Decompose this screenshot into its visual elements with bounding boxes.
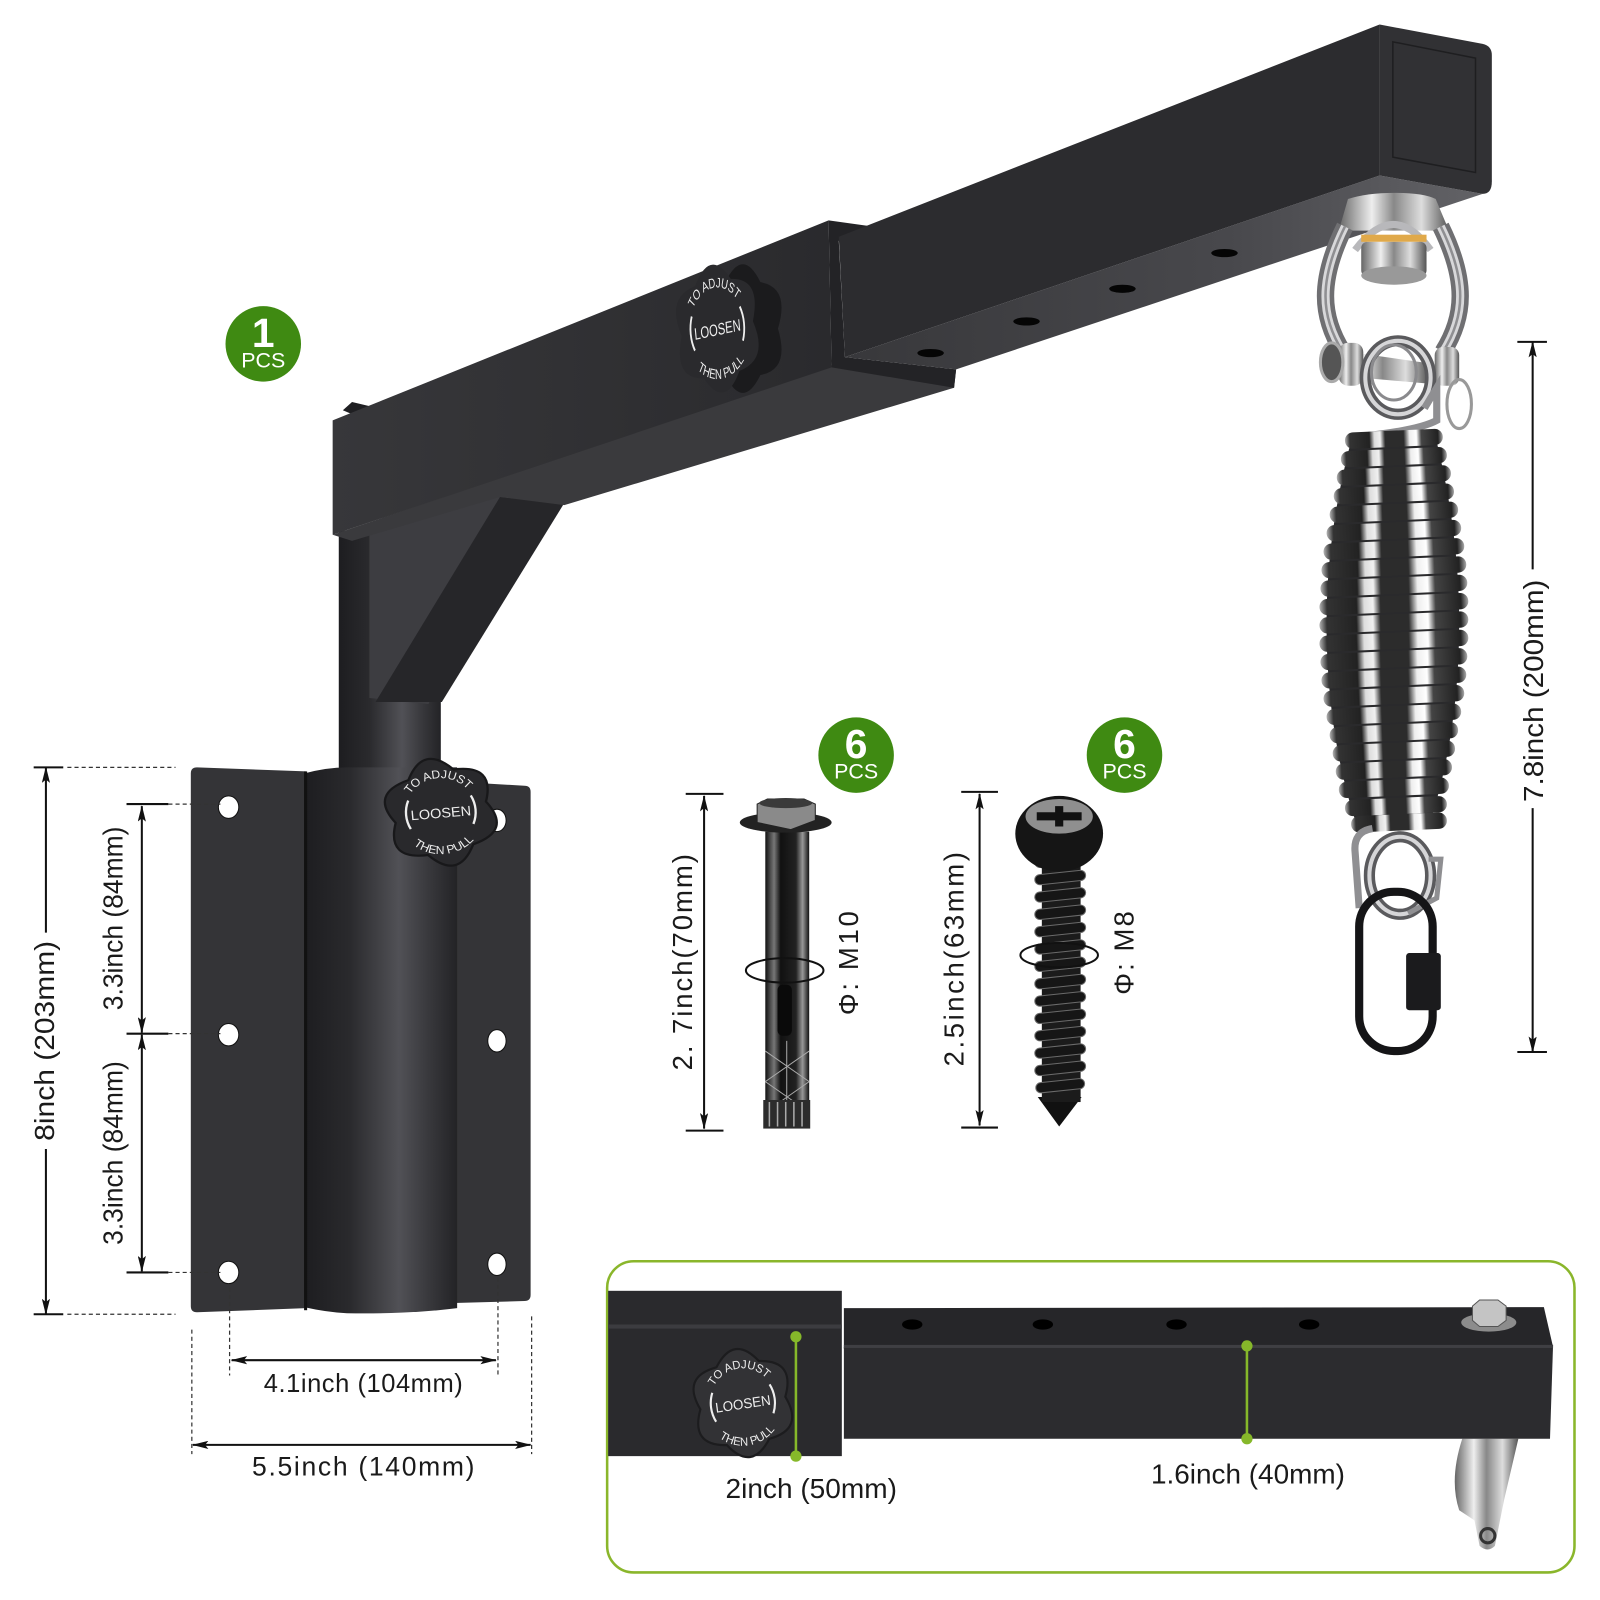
bolt detail	[1461, 1300, 1516, 1332]
badge: 6 PCS anchor: 6	[845, 721, 867, 767]
dimension: spring length	[1517, 342, 1549, 1052]
knob on sleeve: THEN PULL	[700, 357, 744, 380]
dimension: screw length: 2.5inch(63mm)	[938, 852, 969, 1066]
spring body	[1327, 434, 1459, 827]
shackle loop	[1326, 224, 1460, 352]
shackle and spring hanger	[1319, 193, 1471, 1051]
right flange	[454, 782, 531, 1303]
knob on plate	[384, 758, 498, 867]
quick link carabiner	[1359, 892, 1441, 1051]
swivel barrel	[1361, 235, 1427, 285]
gusset brace	[369, 480, 564, 704]
badge: 6 PCS screw: 6	[1113, 721, 1136, 767]
badge: 6 PCS anchor: PCS	[834, 760, 878, 784]
badge: 6 PCS screw	[1087, 717, 1162, 793]
knob detail: TO ADJUST	[707, 1360, 772, 1384]
knob detail: LOOSEN	[714, 1392, 772, 1416]
screw threads	[1034, 852, 1086, 1093]
knob on plate: THEN PULL	[416, 837, 474, 854]
badge: 6 PCS screw: PCS	[1102, 760, 1146, 784]
dimension: plate width	[192, 1316, 532, 1482]
badge: 6 PCS anchor	[818, 717, 894, 793]
inner beam detail	[844, 1307, 1553, 1439]
left flange	[191, 767, 306, 1312]
dimension: hole width: 4.1inch (104mm)	[264, 1370, 463, 1398]
top spring ring	[1357, 341, 1437, 437]
wall mount arm assembly	[332, 24, 1492, 768]
knob detail: THEN PULL	[722, 1427, 775, 1446]
dimension: hole spacing upper: 3.3inch (84mm)	[97, 827, 128, 1010]
dimension: spring length: 7.8inch (200mm)	[1518, 580, 1549, 802]
outer sleeve	[333, 220, 956, 541]
shackle detail	[1455, 1439, 1518, 1549]
dimension: plate height: 8inch (203mm)	[29, 941, 60, 1141]
label: anchor diameter: Φ: M10	[833, 911, 864, 1015]
plate tube	[304, 767, 457, 1313]
dimension: plate height	[29, 767, 176, 1314]
diameter ring	[1020, 943, 1098, 967]
knob on plate: TO ADJUST	[404, 770, 474, 792]
wall plate	[190, 758, 531, 1314]
outer sleeve detail	[608, 1291, 842, 1456]
diameter ring	[746, 958, 823, 983]
knob on sleeve	[688, 264, 782, 393]
panel: tube size detail	[606, 1260, 1576, 1574]
knob on sleeve: LOOSEN	[693, 315, 741, 343]
label: beam size: 1.6inch (40mm)	[1151, 1459, 1345, 1490]
expansion anchor bolt	[740, 798, 832, 1129]
dimension: anchor length	[667, 794, 723, 1131]
vertical tube	[339, 531, 441, 776]
knob on plate: LOOSEN	[410, 804, 472, 824]
knob detail	[692, 1348, 794, 1458]
dimension: hole width	[230, 1278, 498, 1398]
inner extension beam	[839, 24, 1483, 369]
mounting holes	[218, 796, 506, 1284]
dimension: hole spacing lower: 3.3inch (84mm)	[97, 1061, 128, 1245]
badge: 1 PCS: PCS	[241, 348, 285, 372]
wood screw	[1015, 796, 1103, 1127]
shackle pin	[1320, 343, 1471, 429]
beam end cap	[1380, 24, 1492, 194]
label: screw diameter: Φ: M8	[1109, 911, 1140, 995]
green marker: beam height	[1241, 1340, 1253, 1444]
spring coils	[1319, 428, 1469, 833]
badge: 1 PCS	[226, 306, 301, 382]
dimension: screw length	[938, 792, 998, 1128]
knob on sleeve: TO ADJUST	[688, 278, 742, 306]
label: sleeve size: 2inch (50mm)	[726, 1473, 897, 1504]
dimension: plate width: 5.5inch (140mm)	[252, 1452, 474, 1482]
badge: 1 PCS: 1	[252, 310, 275, 356]
dimension: anchor length: 2. 7inch(70mm)	[667, 854, 698, 1070]
bottom spring ring	[1355, 829, 1441, 914]
green marker: sleeve height	[790, 1331, 802, 1462]
dimension: hole spacing upper	[97, 804, 220, 1272]
swivel mount	[1339, 193, 1449, 231]
